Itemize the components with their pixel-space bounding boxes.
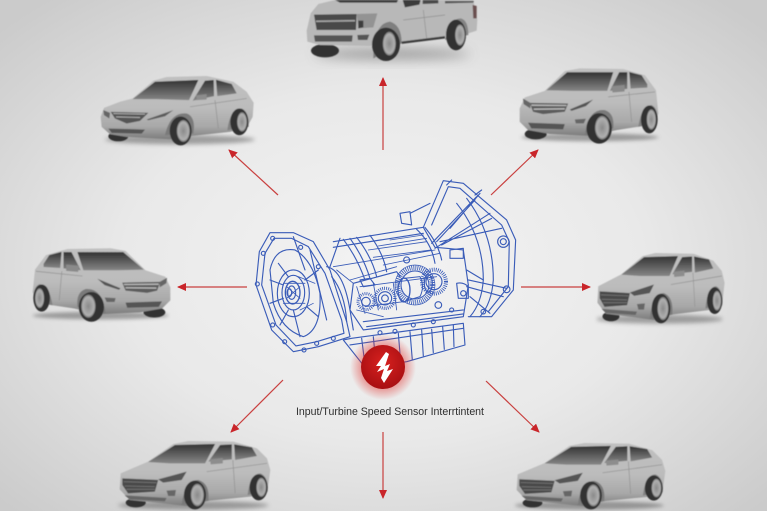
tail housing	[400, 180, 516, 317]
oil pan	[343, 323, 465, 367]
gears	[357, 257, 454, 335]
transmission line drawing	[255, 180, 516, 367]
arrow: left	[178, 286, 247, 288]
arrows: radiating from the transmission	[178, 78, 590, 498]
car: pickup truck, top	[307, 0, 477, 61]
main case	[327, 227, 468, 330]
car: sedan, right	[596, 253, 725, 324]
arrow: right	[521, 286, 590, 288]
sensor fault badge	[350, 334, 416, 400]
arrow: up	[382, 78, 384, 150]
car: hatchback, lower left	[118, 441, 270, 510]
arrow: lower left	[231, 380, 283, 432]
car: sedan, upper left	[101, 76, 255, 145]
arrow: lower right	[486, 381, 539, 432]
arrow: upper right	[491, 150, 538, 195]
arrow: down	[382, 432, 384, 498]
bell housing	[255, 233, 350, 352]
arrow: upper left	[229, 150, 278, 195]
icon: lightning bolt	[376, 352, 393, 383]
car: crossover, left	[33, 248, 170, 322]
glow	[350, 334, 416, 400]
sensor label: Input/Turbine Speed Sensor Interrtintent	[296, 406, 484, 418]
car: SUV, upper right	[520, 68, 658, 144]
red circle	[361, 345, 405, 389]
car: sedan, lower right	[515, 443, 665, 510]
